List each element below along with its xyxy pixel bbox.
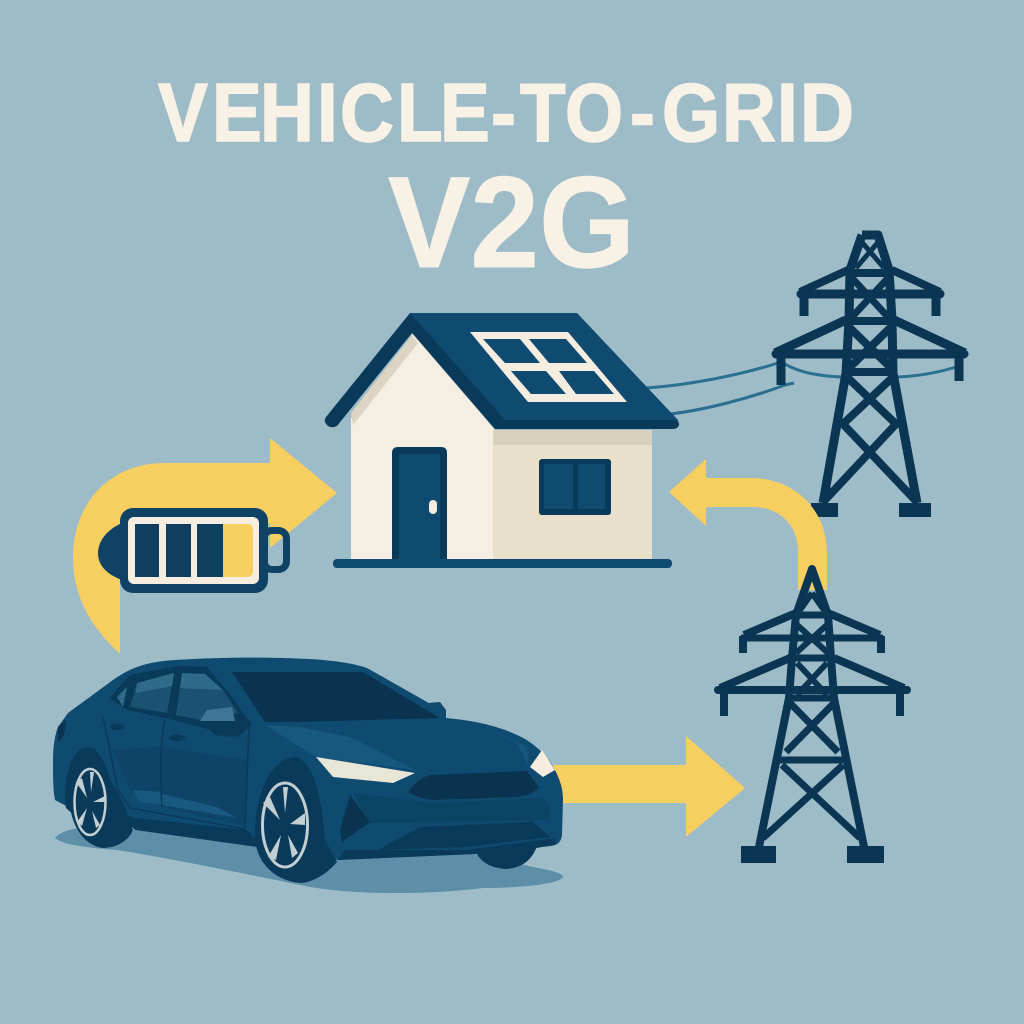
icon: upper transmission tower [775, 235, 965, 517]
arrow: car to grid [553, 736, 745, 837]
grille [408, 771, 539, 800]
windshield [232, 672, 440, 722]
side air intake [340, 795, 370, 842]
left wall [351, 334, 495, 559]
door panel shading [113, 747, 247, 826]
ground line [333, 559, 672, 568]
front right light [530, 750, 555, 777]
solar panel [470, 332, 627, 402]
roof [410, 313, 678, 429]
gable shadow [351, 335, 418, 425]
rear tyre [70, 768, 133, 848]
front wheel arch and tyre [255, 757, 337, 883]
tail light [58, 720, 66, 742]
roof dark edge [325, 313, 679, 429]
upper bumper band [353, 793, 550, 823]
body [53, 658, 563, 860]
rear wheel arch [65, 747, 118, 830]
door [392, 447, 447, 559]
title: V2G: V2G [388, 149, 635, 295]
rear wheel rim [74, 769, 106, 835]
far front tyre [475, 846, 537, 869]
arrow: car to house via battery [73, 438, 337, 654]
rear side window [130, 673, 174, 713]
underbody [118, 813, 265, 847]
car shadow [55, 828, 563, 893]
side mirror [200, 719, 241, 737]
title: vehicle-to-grid: VEHICLE-TO-GRID [158, 66, 854, 159]
door lower reflections [133, 790, 237, 818]
icon: lower transmission tower [718, 569, 907, 863]
lower intake [378, 822, 550, 850]
window [539, 459, 611, 515]
front wheel rim [262, 783, 308, 867]
front side window [176, 673, 238, 720]
window frame [109, 666, 252, 737]
lower lip [338, 838, 555, 860]
door seams [103, 717, 249, 829]
arrow: grid to house [669, 459, 827, 590]
door handles [110, 724, 124, 730]
far mirror [428, 702, 446, 718]
icon: battery [98, 508, 286, 593]
wires: house to upper tower [646, 363, 956, 414]
icon: house [325, 313, 679, 568]
icon: electric car [53, 658, 563, 893]
right wall [493, 430, 652, 559]
hood highlight [265, 725, 415, 770]
headlight [316, 757, 415, 783]
